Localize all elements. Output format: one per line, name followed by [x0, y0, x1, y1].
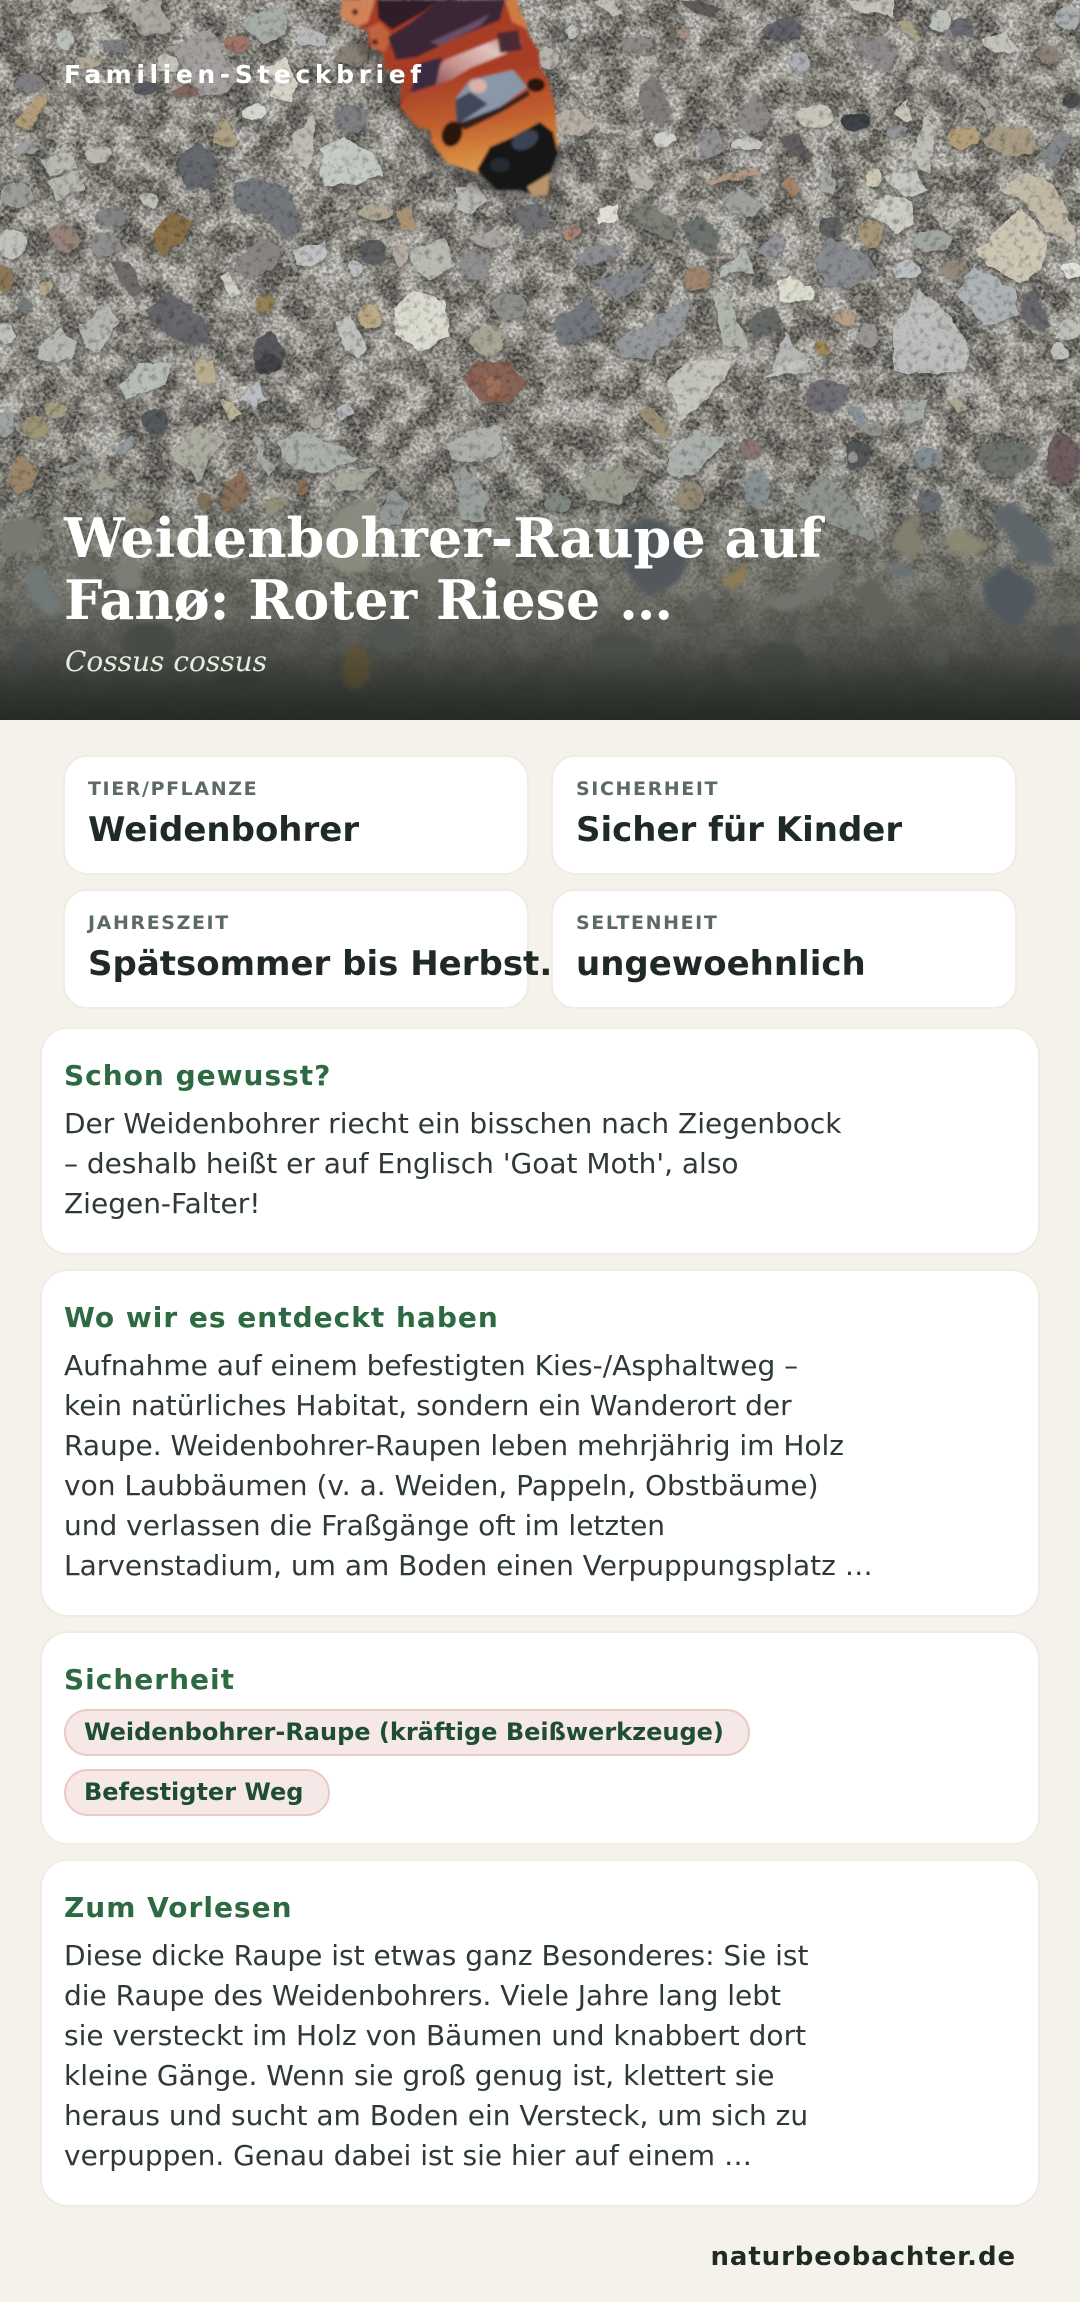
- text block: sie versteckt im Holz von Bäumen und knabbert dort: [64, 2019, 806, 2052]
- value: Weidenbohrer: [88, 810, 359, 850]
- panel: Zum Vorlesen: [40, 1859, 1040, 2207]
- text block: Larvenstadium, um am Boden einen Verpuppungsplatz …: [64, 1549, 873, 1582]
- text block: und verlassen die Fraßgänge oft im letzten: [64, 1509, 665, 1542]
- value: Sicher für Kinder: [576, 810, 902, 850]
- text block: Diese dicke Raupe ist etwas ganz Besonderes: Sie ist: [64, 1939, 808, 1972]
- gravel ground texture: [0, 0, 1080, 720]
- value: Spätsommer bis Herbst.: [88, 944, 552, 984]
- fact card: Sicherheit: [551, 755, 1017, 875]
- text block: kein natürliches Habitat, sondern ein Wanderort der: [64, 1389, 792, 1422]
- label: SICHERHEIT: [576, 778, 719, 800]
- blurred foreground stones: [0, 498, 1080, 692]
- hazard tag: Befestigter Weg: [84, 1778, 303, 1806]
- text block: Aufnahme auf einem befestigten Kies-/Asphaltweg –: [64, 1349, 798, 1382]
- latin name: Cossus cossus: [65, 645, 267, 678]
- heading: Sicherheit: [64, 1663, 235, 1696]
- text block: Ziegen-Falter!: [64, 1187, 260, 1220]
- text block: Raupe. Weidenbohrer-Raupen leben mehrjährig im Holz: [64, 1429, 844, 1462]
- text block: verpuppen. Genau dabei ist sie hier auf einem …: [64, 2139, 752, 2172]
- hazard tag: Weidenbohrer-Raupe (kräftige Beißwerkzeuge): [84, 1718, 724, 1746]
- title: Weidenbohrer-Raupe auf: [64, 506, 822, 570]
- text block: die Raupe des Weidenbohrers. Viele Jahre lang lebt: [64, 1979, 781, 2012]
- label: TIER/PFLANZE: [88, 778, 258, 800]
- label: JAHRESZEIT: [88, 912, 230, 934]
- caterpillar body: [340, 0, 558, 197]
- title: Fanø: Roter Riese …: [64, 568, 673, 632]
- value: ungewoehnlich: [576, 944, 866, 984]
- panel: Wo wir es entdeckt haben: [40, 1269, 1040, 1617]
- title: [64, 506, 825, 632]
- text block: heraus und sucht am Boden ein Versteck, um sich zu: [64, 2099, 808, 2132]
- heading: Schon gewusst?: [64, 1059, 331, 1092]
- text block: – deshalb heißt er auf Englisch 'Goat Moth', also: [64, 1147, 739, 1180]
- label: SELTENHEIT: [576, 912, 718, 934]
- kicker label: Familien-Steckbrief: [64, 60, 426, 89]
- panel: Schon gewusst: [40, 1027, 1040, 1255]
- hero panel: [0, 0, 1080, 720]
- text block: [64, 1107, 842, 1220]
- text block: Der Weidenbohrer riecht ein bisschen nach Ziegenbock: [64, 1107, 842, 1140]
- hero photo: caterpillar on gravel path: [0, 0, 1080, 720]
- hazard tag: [64, 1709, 750, 1756]
- hazard tag: [64, 1769, 330, 1816]
- bottom darkening overlay: [0, 650, 1080, 720]
- text block: [64, 1349, 873, 1582]
- fact card: Jahreszeit: [63, 889, 529, 1009]
- text block: [64, 1939, 808, 2172]
- caterpillar: [340, 0, 565, 200]
- fact card: Tier/Pflanze: [63, 755, 529, 875]
- caterpillar shadow: [345, 30, 565, 200]
- text block: von Laubbäumen (v. a. Weiden, Pappeln, Obstbäume): [64, 1469, 818, 1502]
- sharp stones: [0, 0, 1080, 543]
- footer brand: naturbeobachter.de: [710, 2242, 1016, 2272]
- heading: Zum Vorlesen: [64, 1891, 293, 1924]
- panel: Sicherheit: [40, 1631, 1040, 1845]
- heading: Wo wir es entdeckt haben: [64, 1301, 499, 1334]
- text block: kleine Gänge. Wenn sie groß genug ist, klettert sie: [64, 2059, 774, 2092]
- fact card: Seltenheit: [551, 889, 1017, 1009]
